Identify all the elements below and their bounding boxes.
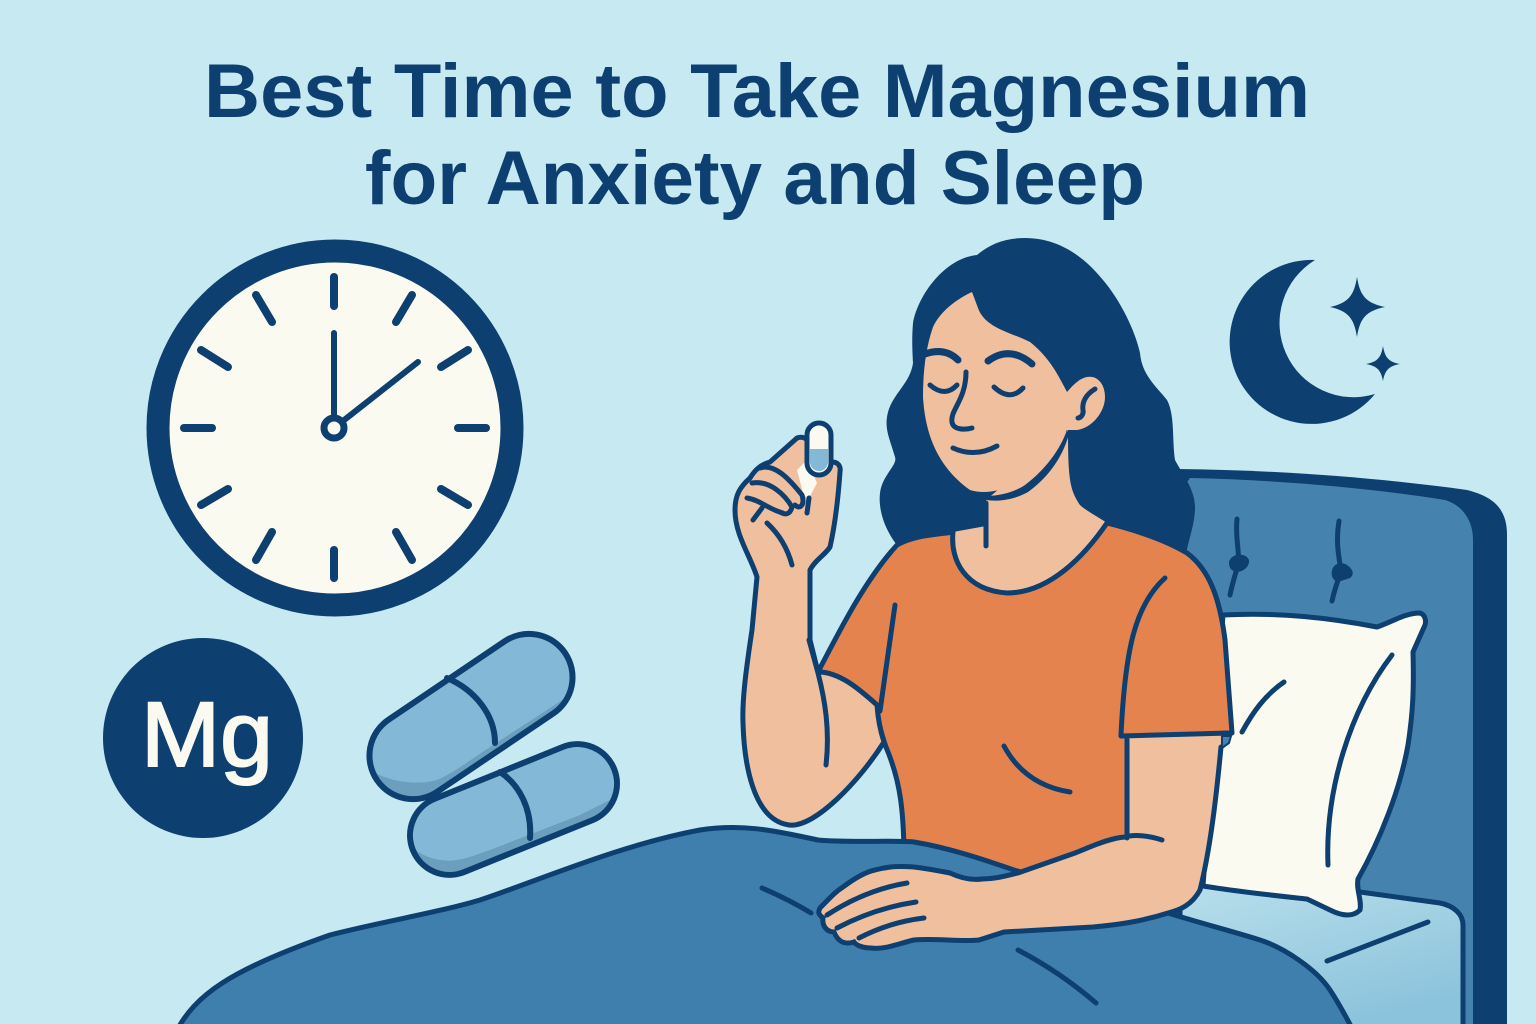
bed sheet xyxy=(1180,885,1463,1024)
orange t-shirt xyxy=(818,523,1232,880)
icon: wall clock xyxy=(158,251,512,605)
icon: magnesium badge: Mg xyxy=(141,684,273,786)
icon: magnesium badge xyxy=(103,638,303,838)
capsule in fingers xyxy=(807,423,831,475)
pillow xyxy=(1203,613,1425,915)
resting arm and hand xyxy=(819,733,1231,948)
icon: crescent moon and stars xyxy=(1230,260,1400,424)
woman holding capsule xyxy=(176,238,1354,1024)
icon: magnesium capsules xyxy=(366,630,620,878)
title: Best Time to Take Magnesium xyxy=(204,49,1310,134)
title xyxy=(204,49,1310,221)
blanket xyxy=(176,827,1354,1024)
raised arm and hand with capsule xyxy=(735,423,884,825)
title: for Anxiety and Sleep xyxy=(365,136,1145,221)
bed headboard xyxy=(1100,469,1507,1024)
hair xyxy=(880,238,1195,560)
face and ear xyxy=(923,292,1105,546)
neck xyxy=(953,430,1107,593)
